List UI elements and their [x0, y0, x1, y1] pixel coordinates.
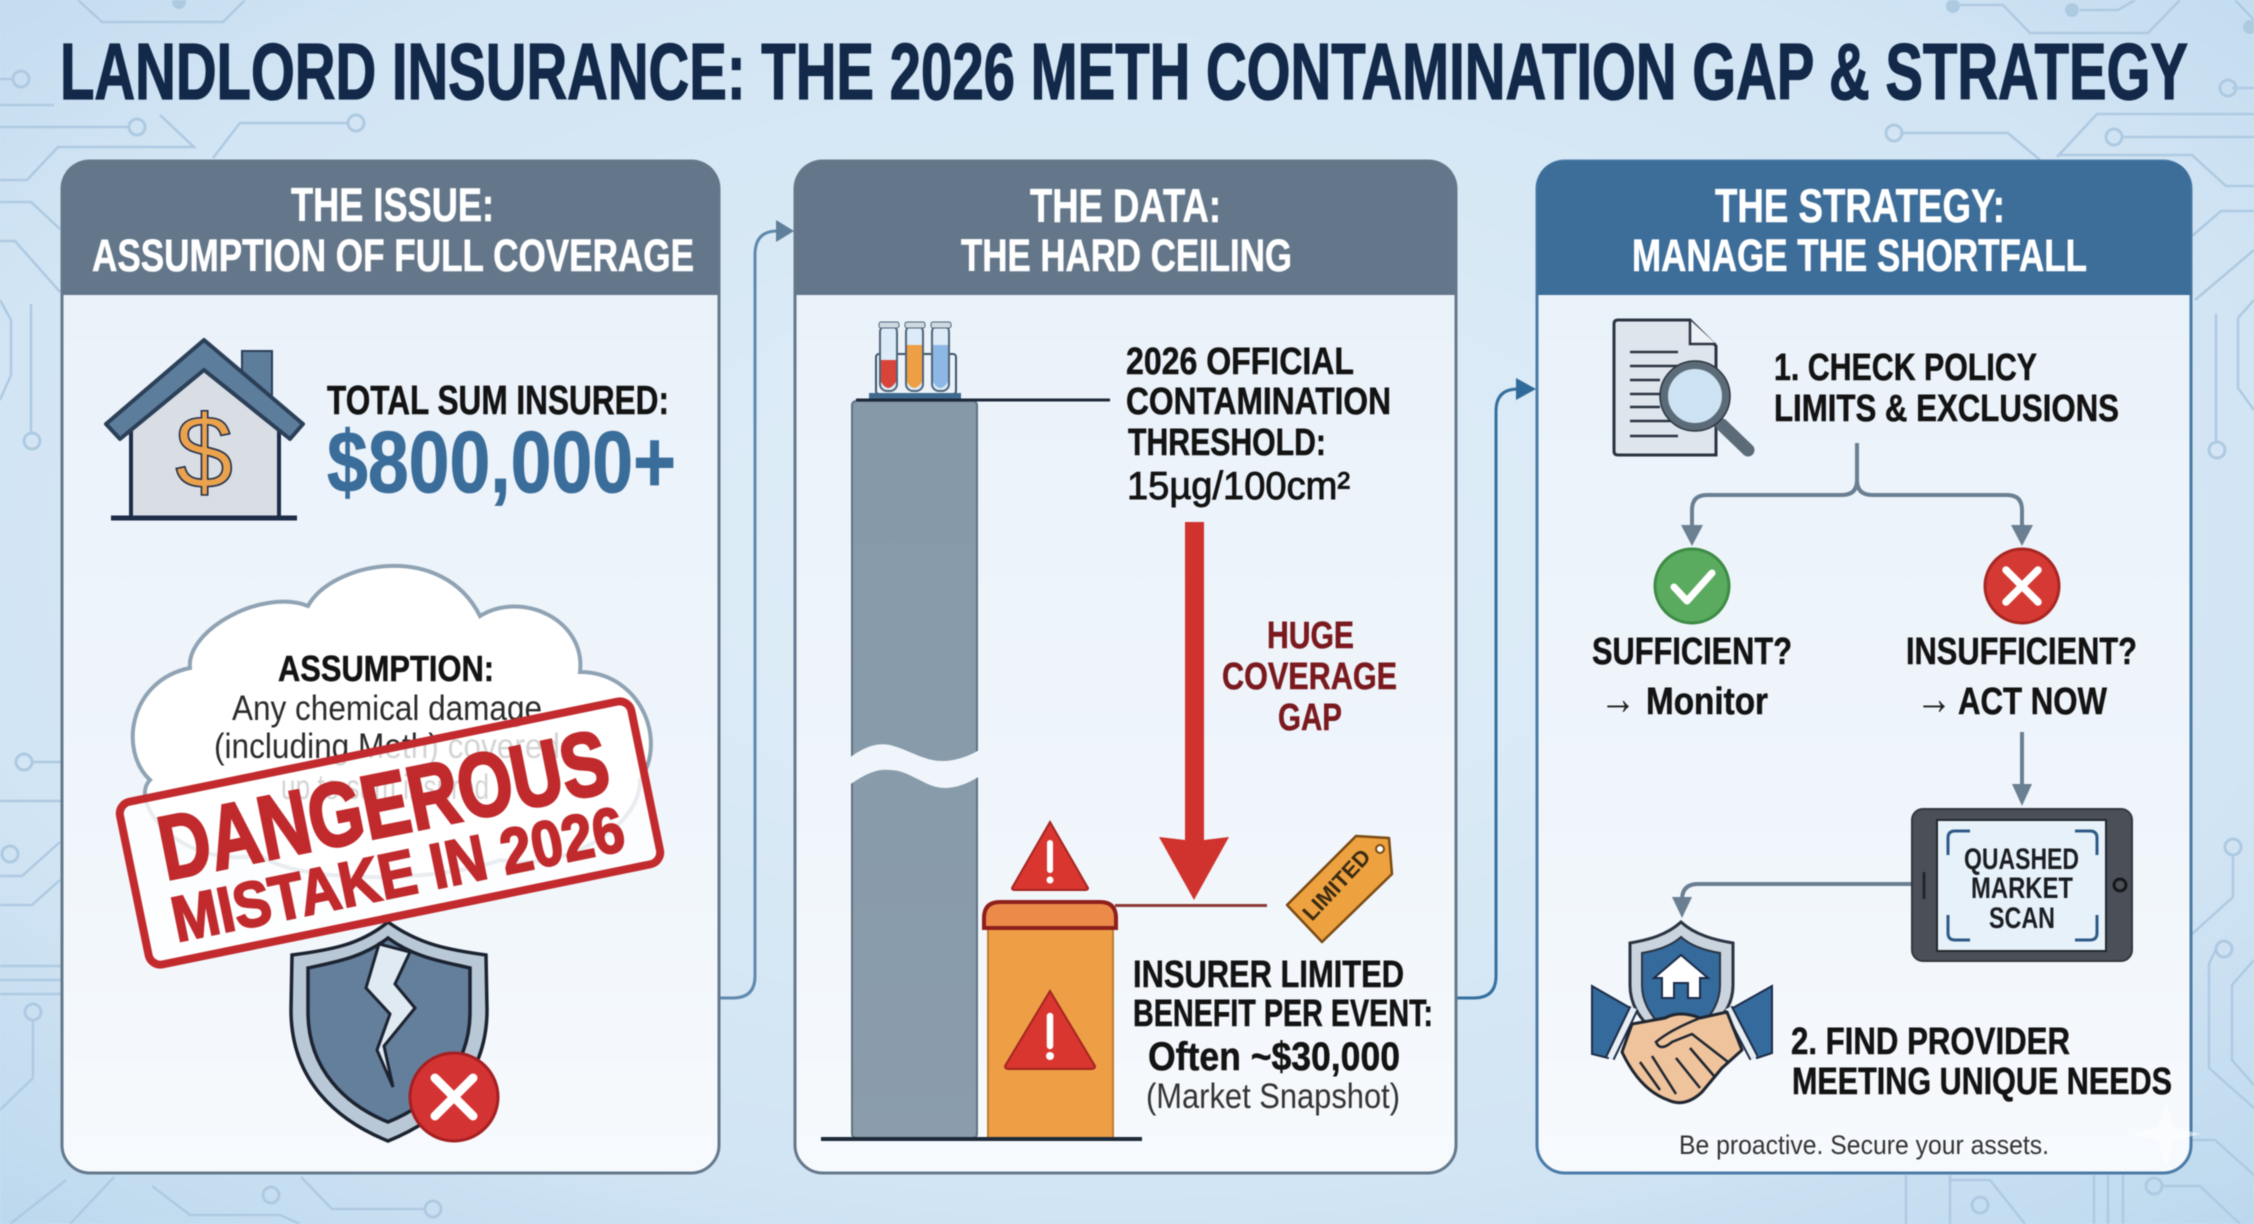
- icon: shield and handshake: [1592, 922, 1772, 1103]
- icon: red cross badge: [410, 1053, 498, 1141]
- header: the issue: THE ISSUE:: [291, 178, 494, 231]
- cloud: assumption: up to sum insured: [281, 768, 489, 807]
- icon: warning triangle above bar: [1012, 822, 1088, 890]
- step 2 label: 2. FIND PROVIDER: [1791, 1021, 2070, 1063]
- stamp: dangerous mistake in 2026: DANGEROUS: [150, 712, 617, 900]
- icon: test tubes: [869, 322, 961, 400]
- step 1 label: [1774, 347, 2119, 430]
- header: the data: THE DATA:: [1030, 179, 1221, 232]
- header: the strategy: MANAGE THE SHORTFALL: [1632, 230, 2087, 281]
- insurer limit label: BENEFIT PER EVENT:: [1133, 993, 1433, 1035]
- arrow: to provider: [1672, 884, 1911, 918]
- insufficient outcome: [1906, 631, 2137, 724]
- insurer limit label: (Market Snapshot): [1146, 1077, 1400, 1116]
- arrow: to market scan: [2012, 732, 2032, 806]
- cloud: assumption: (including Meth) covered: [214, 727, 560, 766]
- insufficient outcome: INSUFFICIENT?: [1906, 631, 2137, 673]
- header: the issue: [62, 161, 719, 295]
- arrow: coverage gap: [1159, 522, 1229, 900]
- huge coverage gap label: [1222, 615, 1397, 739]
- threshold label: 2026 OFFICIAL: [1126, 341, 1354, 383]
- insurer limit label: Often ~$30,000: [1148, 1035, 1400, 1079]
- icon: policy document with magnifier: [1614, 320, 1748, 455]
- stamp: dangerous mistake in 2026: [118, 699, 662, 967]
- insufficient outcome: →: [1916, 672, 1952, 724]
- insufficient outcome: ACT NOW: [1958, 681, 2107, 723]
- arrow: data to strategy: [1456, 378, 1536, 998]
- arrow: issue to data: [719, 220, 794, 998]
- bar: insurer limited benefit: [984, 902, 1116, 1138]
- huge coverage gap label: HUGE: [1267, 615, 1354, 657]
- cloud: assumption: Any chemical damage: [232, 689, 542, 728]
- icon: tablet with quashed market scan: SCAN: [1989, 902, 2055, 935]
- total sum insured value: $800,000+: [327, 414, 676, 511]
- step 2 label: MEETING UNIQUE NEEDS: [1792, 1061, 2172, 1103]
- step 2 label: [1791, 1021, 2172, 1103]
- cloud: assumption: ASSUMPTION:: [278, 648, 494, 689]
- insurer limit label: INSURER LIMITED: [1133, 954, 1404, 996]
- sufficient outcome: →: [1600, 672, 1636, 724]
- icon: tablet with quashed market scan: QUASHED: [1964, 843, 2079, 876]
- header: the issue: ASSUMPTION OF FULL COVERAGE: [92, 230, 694, 281]
- panel: the strategy: [1537, 161, 2191, 1173]
- icon: warning triangle on bar: [1005, 991, 1095, 1069]
- bar: official threshold (truncated): [845, 401, 988, 1138]
- stamp: dangerous mistake in 2026: MISTAKE IN 2026: [165, 793, 630, 956]
- header: the data: [795, 161, 1456, 295]
- icon: tablet with quashed market scan: [1912, 809, 2132, 961]
- icon: house with dollar sign: $: [175, 395, 233, 511]
- cloud: assumption: [133, 566, 651, 877]
- header: the strategy: THE STRATEGY:: [1715, 179, 2005, 232]
- panel: the issue: [62, 161, 719, 1173]
- icon: limited price tag: [1287, 836, 1392, 942]
- huge coverage gap label: COVERAGE: [1222, 656, 1397, 698]
- threshold label: THRESHOLD:: [1128, 422, 1326, 464]
- icon: tablet with quashed market scan: MARKET: [1971, 872, 2073, 905]
- sufficient outcome: [1592, 631, 1792, 724]
- step 1 label: LIMITS & EXCLUSIONS: [1774, 388, 2119, 430]
- header: the strategy: [1537, 161, 2191, 295]
- arrow: decision branch: [1681, 443, 2033, 546]
- insurer limit label: [1133, 954, 1433, 1116]
- icon: red cross: [1985, 549, 2059, 623]
- icon: house with dollar sign: [106, 340, 303, 518]
- panel: the data: [795, 161, 1456, 1173]
- sufficient outcome: SUFFICIENT?: [1592, 631, 1792, 673]
- huge coverage gap label: GAP: [1278, 697, 1342, 739]
- footer note: Be proactive. Secure your assets.: [1679, 1130, 2049, 1160]
- icon: limited price tag: LIMITED: [1297, 844, 1376, 925]
- total sum insured label: TOTAL SUM INSURED:: [327, 377, 669, 423]
- sufficient outcome: Monitor: [1646, 681, 1768, 723]
- step 1 label: 1. CHECK POLICY: [1774, 347, 2037, 389]
- header: the data: THE HARD CEILING: [961, 230, 1292, 281]
- icon: broken shield: [291, 922, 498, 1141]
- threshold label: 15µg/100cm²: [1127, 465, 1350, 508]
- threshold label: CONTAMINATION: [1126, 381, 1391, 423]
- threshold label: [1126, 341, 1391, 508]
- icon: green check: [1655, 549, 1729, 623]
